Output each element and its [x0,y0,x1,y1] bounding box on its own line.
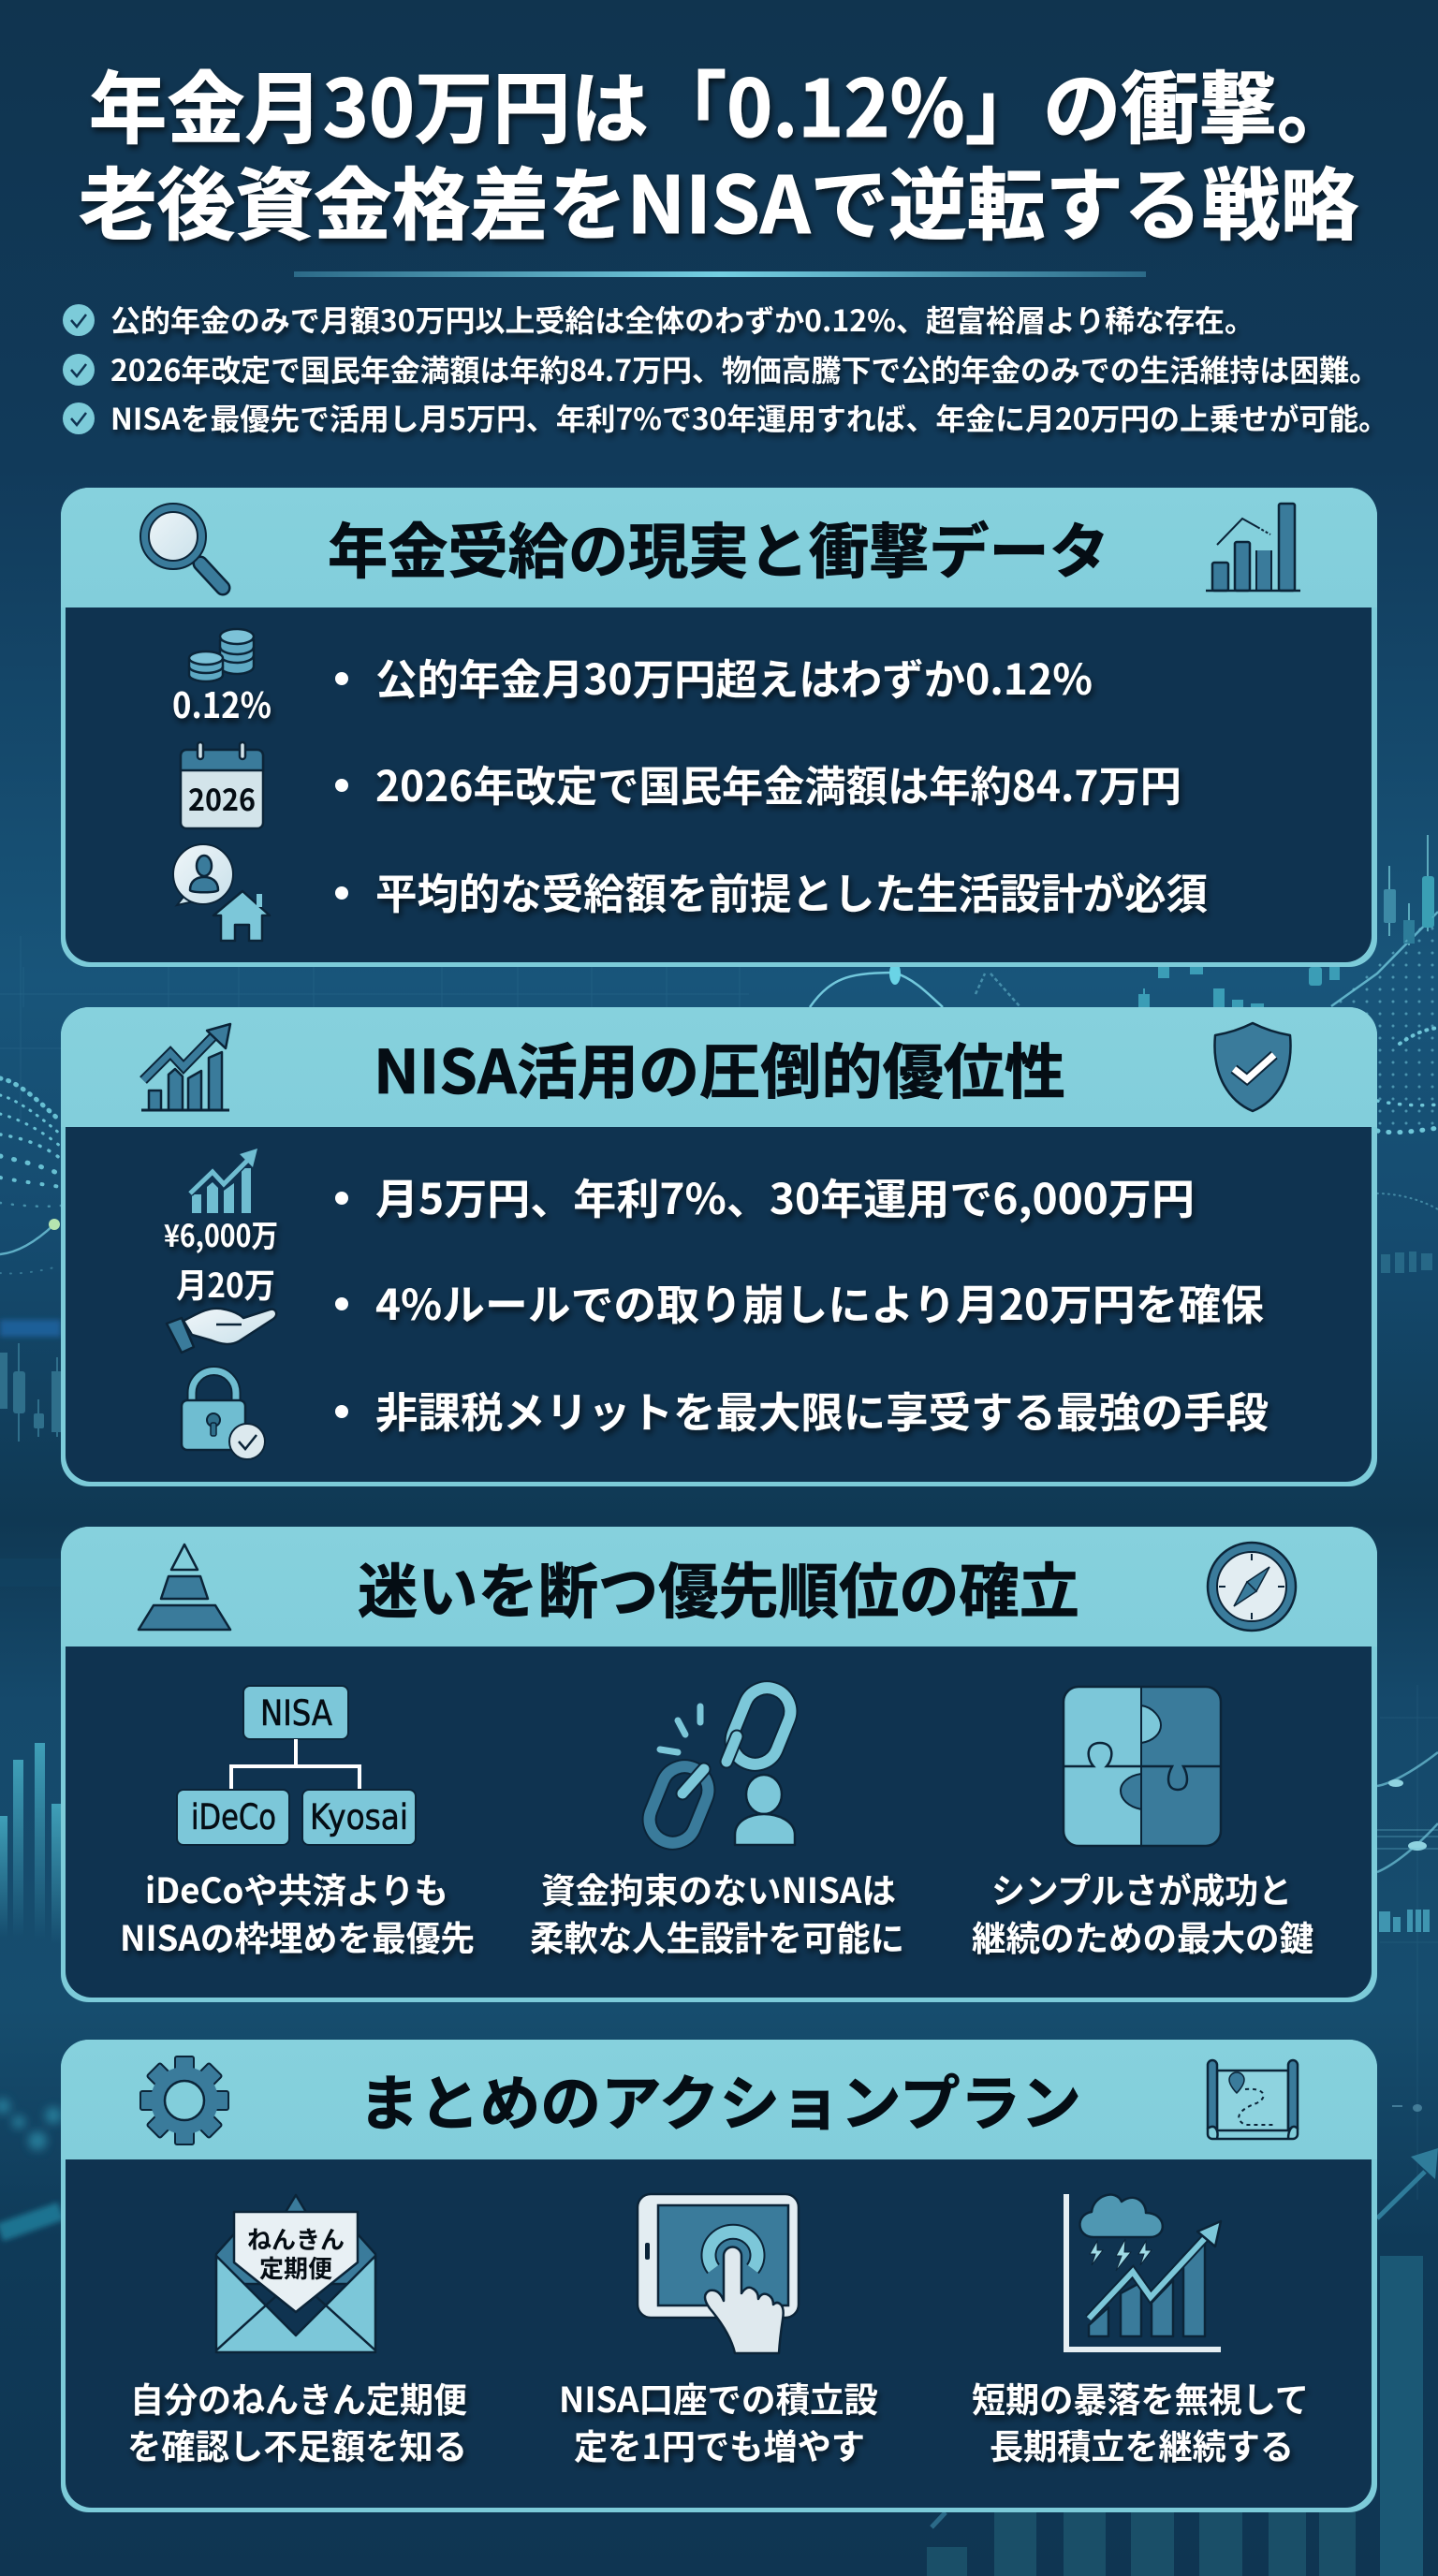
summary bullet list [63,298,1388,439]
icon: person and house [173,844,270,941]
icon: coins with 0.12%: 0.12% [172,677,271,728]
column: pension letter envelope: を確認し不足額を知る [127,2419,467,2469]
heading: 迷いを断つ優先順位の確立 [358,1544,1079,1631]
column: pension letter envelope: 自分のねんきん定期便 [130,2372,467,2422]
icon: calendar 2026: 2026 [188,777,256,820]
bullet list: 平均的な受給額を前提とした生活設計が必須 [375,860,1208,921]
column: NISA priority tree: Kyosai [310,1797,408,1837]
column: NISA priority tree: NISA [260,1693,332,1734]
column: broken chain and person: 柔軟な人生設計を可能に [530,1910,904,1961]
column: tablet tap: 定を1円でも増やす [574,2419,865,2469]
bullet list: 月5万円、年利7%、30年運用で6,000万円 [375,1165,1195,1226]
heading: NISA活用の圧倒的優位性 [374,1025,1065,1111]
bullet list: 4%ルールでの取り崩しにより月20万円を確保 [375,1271,1264,1332]
panel: 迷いを断つ優先順位の確立 [61,1527,1377,2002]
left-side dot sphere [0,1078,61,1274]
column: pension letter envelope: 定期便 [259,2250,332,2285]
column: NISA priority tree: iDeCoや共済よりも [145,1863,448,1913]
icon: growth chart [141,1024,230,1110]
icon: magnifier [140,504,223,588]
title: 年金月30万円は「0.12%」の衝撃。 [89,47,1355,160]
icon: calendar 2026 [181,742,263,828]
column: NISA priority tree [120,1686,475,1961]
icon: growth with ¥6,000万: ¥6,000万 [164,1211,278,1256]
panel: 年金受給の現実と衝撃データ [61,488,1377,967]
panel: NISA活用の圧倒的優位性 [61,1007,1377,1486]
icon: bar chart [1206,504,1300,591]
column: storm and rising chart [972,2194,1309,2469]
column: tablet tap: NISA口座での積立設 [559,2372,878,2422]
bullet list [335,646,1208,921]
title [79,47,1358,256]
right-side candles [1384,835,1434,945]
heading: まとめのアクションプラン [359,2056,1081,2143]
bullet list: 公的年金月30万円超えはわずか0.12% [375,646,1093,707]
bullet list: 2026年改定で国民年金満額は年約84.7万円 [375,753,1181,813]
icon: hand with 月20万: 月20万 [176,1259,275,1308]
panel: まとめのアクションプラン [61,2040,1377,2512]
icon: compass [1208,1543,1296,1631]
icon: hand with 月20万 [167,1259,276,1353]
bullet list: 非課税メリットを最大限に享受する最強の手段 [375,1379,1269,1440]
icon: gear [140,2056,228,2144]
column: pension letter envelope [127,2195,467,2469]
icon: growth with ¥6,000万 [164,1149,278,1256]
summary item 1: 公的年金のみで月額30万円以上受給は全体のわずか0.12%、超富裕層より稀な存在。 [110,298,1255,341]
right lower deco [1377,1830,1438,1849]
title: 老後資金格差をNISAで逆転する戦略 [79,143,1358,256]
column: tablet tap [559,2194,878,2469]
column: puzzle: シンプルさが成功と [991,1863,1292,1913]
column: storm and rising chart: 短期の暴落を無視して [972,2372,1309,2422]
column: pension letter envelope: ねんきん [247,2221,345,2256]
title divider [294,271,1146,277]
icon: coins with 0.12% [172,629,271,728]
column: broken chain and person: 資金拘束のないNISAは [541,1863,896,1913]
column: NISA priority tree: iDeCo [191,1797,276,1837]
summary item 2: 2026年改定で国民年金満額は年約84.7万円、物価高騰下で公的年金のみでの生活維持は困難。 [110,347,1379,390]
icon: padlock with check [182,1370,265,1459]
column: puzzle: 継続のための最大の鍵 [972,1910,1313,1961]
column: broken chain and person [530,1681,904,1961]
column: storm and rising chart: 長期積立を継続する [990,2419,1294,2469]
heading: 年金受給の現実と衝撃データ [328,505,1109,591]
bullet list [335,1165,1269,1440]
summary item 3: NISAを最優先で活用し月5万円、年利7%で30年運用すれば、年金に月20万円の上乗せが可能。 [110,396,1388,439]
icon: shield check [1214,1023,1291,1111]
column: NISA priority tree: NISAの枠埋めを最優先 [120,1910,475,1961]
icon: map scroll [1208,2060,1298,2139]
icon: pyramid [139,1544,230,1630]
column: puzzle [972,1687,1313,1961]
